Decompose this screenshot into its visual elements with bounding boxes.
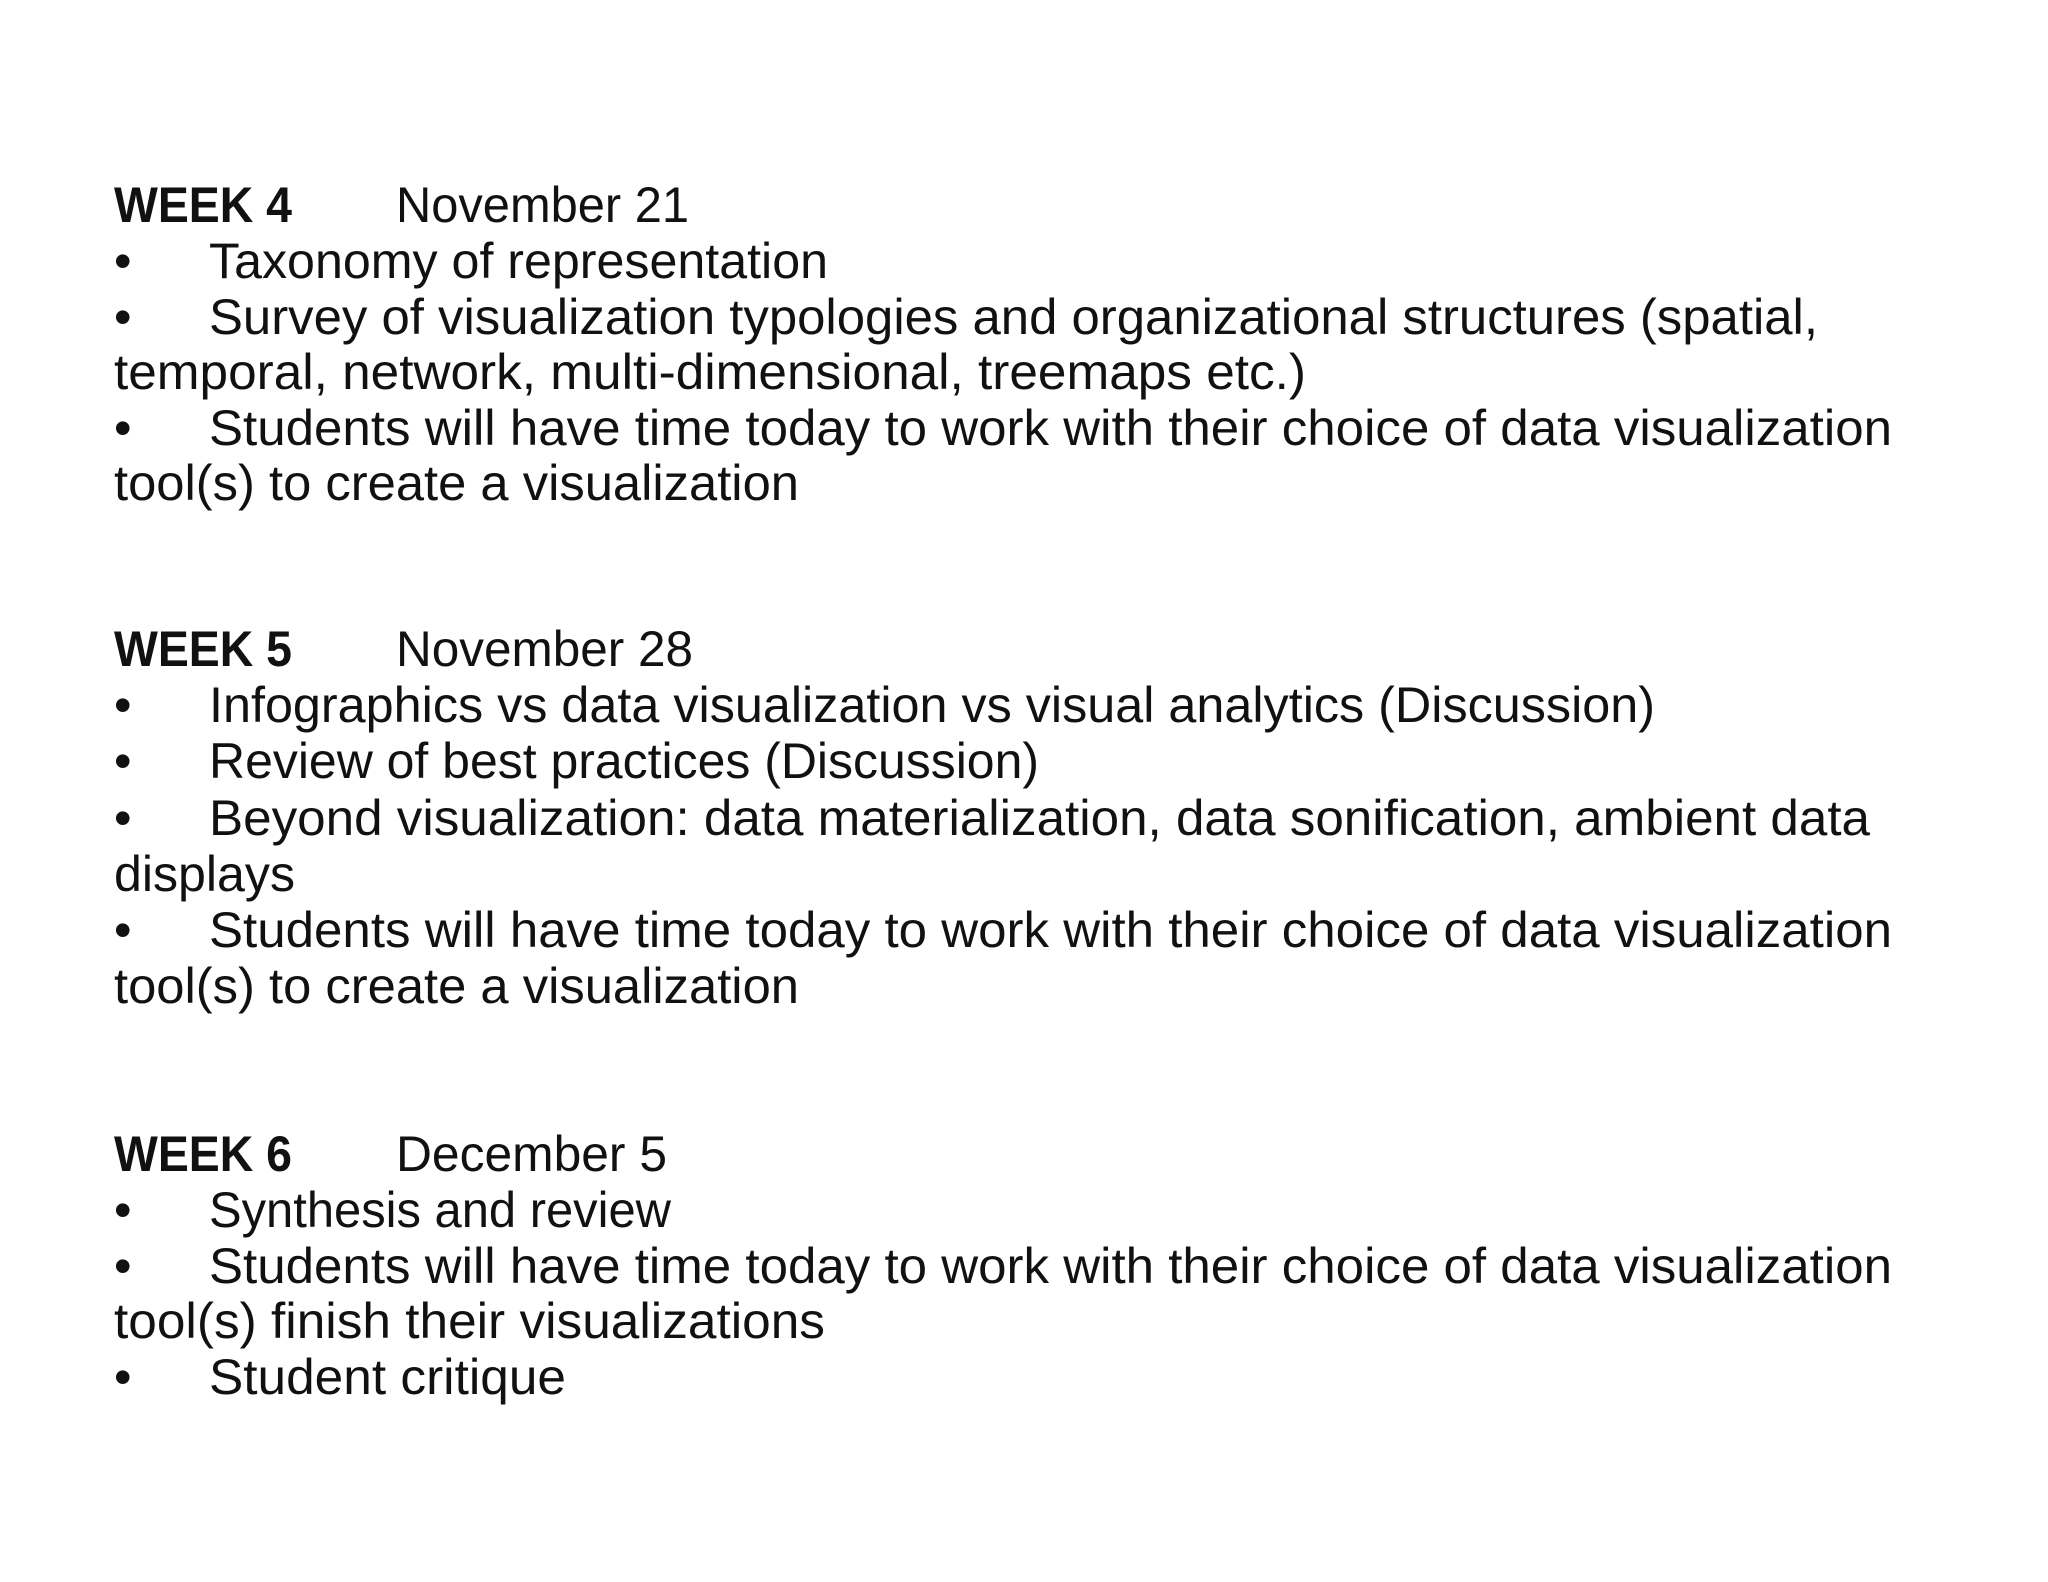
bullet list: week 4: • (114, 400, 132, 456)
bullet list: week 4: Survey of visualization typologies and organizational structures (spatial, (209, 289, 1818, 345)
date: November 28: November 28 (396, 621, 693, 677)
bullet list: week 4 (114, 233, 1892, 511)
bullet list: week 5: Beyond visualization: data materialization, data sonification, ambient data (209, 790, 1870, 846)
panel: week 6 (114, 1126, 1892, 1405)
bullet list: week 5: • (114, 677, 132, 733)
bullet list: week 4: Taxonomy of representation (209, 233, 828, 289)
bullet list: week 4: temporal, network, multi-dimensional, treemaps etc.) (114, 344, 1306, 400)
bullet list: week 6: Synthesis and review (209, 1182, 672, 1238)
bullet list: week 6 (114, 1182, 1892, 1405)
bullet list: week 5: displays (114, 846, 295, 902)
date: December 5: December 5 (396, 1126, 667, 1182)
bullet list: week 4: Students will have time today to work with their choice of data visualization (209, 400, 1892, 456)
bullet list: week 5: Infographics vs data visualization vs visual analytics (Discussion) (209, 677, 1655, 733)
date: November 21: November 21 (396, 177, 689, 233)
bullet list: week 4: • (114, 289, 132, 345)
heading: week 4: WEEK 4 (114, 177, 292, 233)
heading: week 5: WEEK 5 (114, 621, 292, 677)
bullet list: week 6: tool(s) finish their visualizations (114, 1293, 825, 1349)
bullet list: week 5: tool(s) to create a visualization (114, 958, 799, 1014)
bullet list: week 5: Students will have time today to work with their choice of data visualization (209, 902, 1892, 958)
panel: week 5 (114, 621, 1892, 1014)
panel: week 4 (114, 177, 1892, 511)
bullet list: week 6: Students will have time today to work with their choice of data visualization (209, 1238, 1892, 1294)
bullet list: week 4: • (114, 233, 132, 289)
bullet list: week 6: Student critique (209, 1349, 566, 1405)
bullet list: week 5: • (114, 790, 132, 846)
bullet list: week 5: • (114, 733, 132, 789)
bullet list: week 5 (114, 677, 1892, 1014)
heading: week 6: WEEK 6 (114, 1126, 292, 1182)
bullet list: week 5: • (114, 902, 132, 958)
bullet list: week 6: • (114, 1182, 132, 1238)
bullet list: week 5: Review of best practices (Discussion) (209, 733, 1039, 789)
bullet list: week 6: • (114, 1349, 132, 1405)
bullet list: week 4: tool(s) to create a visualization (114, 455, 799, 511)
bullet list: week 6: • (114, 1238, 132, 1294)
